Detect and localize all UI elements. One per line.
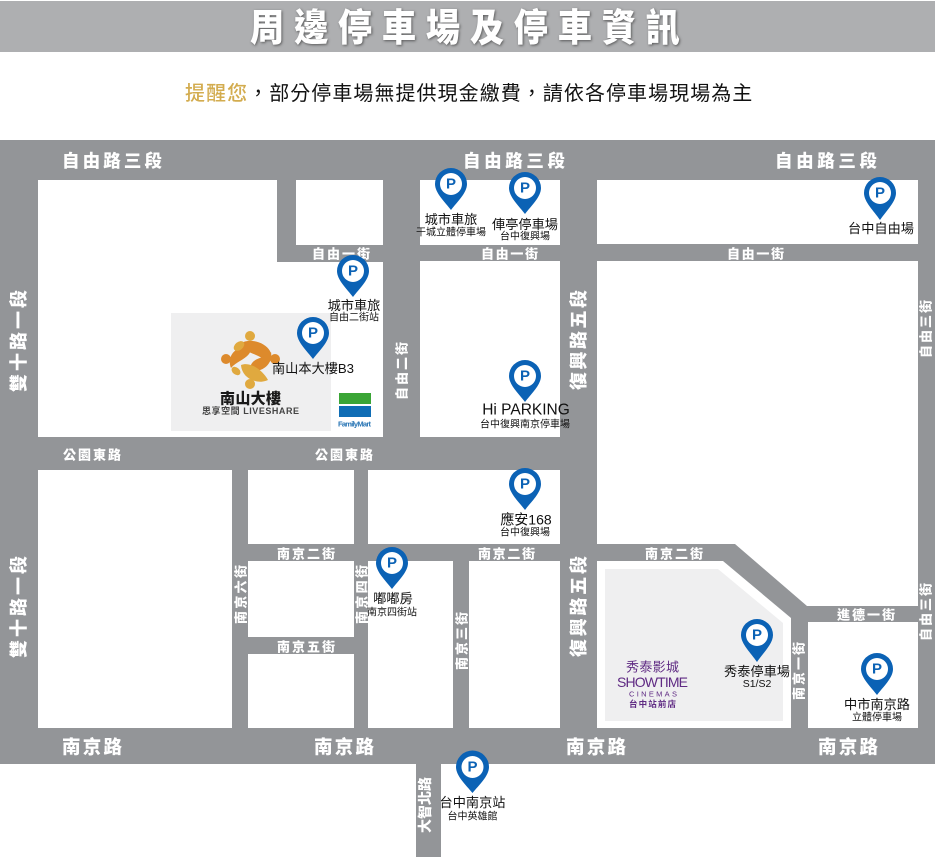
parking pin: City Hotel Gancheng: P [446, 176, 456, 192]
panel: Showtime Cinemas [605, 569, 783, 721]
vertical road labels: 自由二街 [394, 342, 410, 400]
parking pin: Dudufang [367, 547, 417, 618]
Showtime branch: 台中站前店 [629, 699, 676, 709]
parking pin: Showtime S1/S2: S1/S2 [743, 678, 771, 690]
vertical road labels [8, 290, 934, 833]
parking pin: Showtime S1/S2 [724, 619, 790, 690]
parking pin: Taichung Ziyou: P [875, 184, 885, 202]
Nanshan building name: 南山大樓 [220, 390, 281, 408]
Showtime Chinese name: 秀泰影城 [626, 660, 679, 674]
icon: Nanshan swirl logo [221, 331, 280, 389]
vertical road labels: 南京一街 [792, 642, 806, 700]
horizontal road labels: 進德一街 [837, 608, 895, 622]
parking pin: City Hotel Ziyou 2nd St: 城市車旅 [328, 297, 380, 313]
horizontal road labels [62, 151, 895, 758]
parking pin: Taichung Nanjing Station [440, 750, 505, 822]
parking pin: Hi Parking: P [520, 368, 530, 384]
horizontal road labels: 自由一街 [312, 246, 370, 262]
parking pin: City Hotel Gancheng: 城市車旅 [425, 211, 477, 227]
parking pin: Chuting Fuxing: 俥亭停車場 [492, 216, 558, 232]
parking pin: Chuting Fuxing [492, 172, 558, 242]
header band [0, 1, 935, 52]
parking pin: City Hotel Ziyou 2nd St: 自由二街站 [329, 310, 379, 324]
icon: FamilyMart logo: FamilyMart [338, 420, 372, 428]
parking pin: Hi Parking [480, 360, 570, 430]
parking pin: Chuting Fuxing: 台中復興場 [500, 230, 550, 242]
parking pin: Showtime S1/S2: P [752, 626, 762, 644]
parking pin: Nanjing Road [844, 653, 910, 724]
horizontal road labels: 自由路三段 [775, 151, 878, 171]
horizontal road labels: 公園東路 [315, 448, 373, 462]
parking pin: Nanshan B3 [272, 317, 354, 376]
Cinemas text: CINEMAS [629, 690, 677, 698]
parking pin: Chuting Fuxing: P [520, 180, 530, 196]
vertical road labels: 自由三街 [918, 583, 934, 641]
vertical road labels: 大智北路 [417, 777, 433, 833]
Showtime logo text: SHOWTIME [617, 674, 688, 690]
horizontal road labels: 自由一街 [481, 246, 538, 262]
parking pin: Nanshan B3: P [308, 324, 318, 342]
vertical road labels: 復興路五段 [568, 290, 589, 390]
horizontal road labels: 南京路 [314, 736, 374, 758]
reminder notice: 提醒您，部分停車場無提供現金繳費，請依各停車場現場為主 [185, 83, 753, 105]
vertical road labels: 自由三街 [918, 300, 934, 358]
vertical road labels: 南京四街 [354, 565, 370, 624]
parking pin: Hi Parking: 台中復興南京停車場 [480, 418, 570, 430]
parking pin: Nanjing Road: 中市南京路 [844, 696, 910, 712]
panel: Nanshan building [171, 313, 372, 431]
parking pin: Hi Parking: Hi PARKING [482, 402, 570, 418]
horizontal road labels: 南京路 [818, 736, 878, 758]
vertical road labels: 復興路五段 [568, 556, 589, 657]
horizontal road labels: 南京二街 [277, 546, 335, 562]
parking pin: Dudufang: 嘟嘟房 [373, 591, 413, 606]
parking pin: Ying An 168 [500, 468, 552, 538]
vertical road labels: 雙十路一段 [8, 556, 29, 658]
parking pin: Nanjing Road: P [872, 660, 882, 678]
parking pin: City Hotel Ziyou 2nd St: P [348, 262, 358, 280]
parking pin: City Hotel Ziyou 2nd St [328, 255, 380, 324]
parking pin: Ying An 168: P [520, 476, 530, 492]
parking pin: Taichung Nanjing Station: 台中南京站 [440, 795, 505, 810]
title: 周邊停車場及停車資訊 [250, 8, 690, 50]
parking pin: Nanshan B3: 南山本大樓B3 [272, 361, 354, 376]
horizontal road labels: 自由一街 [727, 246, 784, 262]
horizontal road labels: 南京二街 [645, 546, 703, 562]
horizontal road labels: 南京五街 [277, 640, 335, 654]
parking pin: City Hotel Gancheng: 干城立體停車場 [416, 226, 486, 238]
parking pin: Ying An 168: 應安168 [500, 512, 552, 528]
parking pin: Showtime S1/S2: 秀泰停車場 [724, 663, 790, 679]
horizontal road labels: 南京二街 [478, 546, 535, 562]
city blocks [38, 180, 918, 728]
parking pin: Dudufang: P [387, 554, 397, 572]
horizontal road labels: 公園東路 [63, 448, 121, 462]
parking pin: Nanjing Road: 立體停車場 [852, 710, 902, 724]
horizontal road labels: 南京路 [566, 736, 626, 758]
Liveshare caption: 思享空間 LIVESHARE [202, 405, 299, 416]
parking pin: City Hotel Gancheng [416, 168, 486, 238]
vertical road labels: 雙十路一段 [8, 290, 29, 392]
horizontal road labels: 自由路三段 [463, 151, 566, 171]
parking pin: Taichung Ziyou [848, 177, 914, 236]
icon: FamilyMart logo [338, 393, 372, 428]
parking pin: Taichung Nanjing Station: 台中英雄館 [448, 810, 498, 822]
vertical road labels: 南京三街 [454, 612, 470, 670]
vertical road labels: 南京六街 [234, 565, 248, 624]
horizontal road labels: 自由路三段 [62, 151, 162, 171]
parking pin: Ying An 168: 台中復興場 [500, 526, 550, 538]
parking pin: Taichung Ziyou: 台中自由場 [848, 221, 914, 236]
horizontal road labels: 南京路 [62, 736, 122, 758]
parking pin: Dudufang: 南京四街站 [367, 606, 417, 618]
parking pin: Taichung Nanjing Station: P [467, 758, 478, 776]
